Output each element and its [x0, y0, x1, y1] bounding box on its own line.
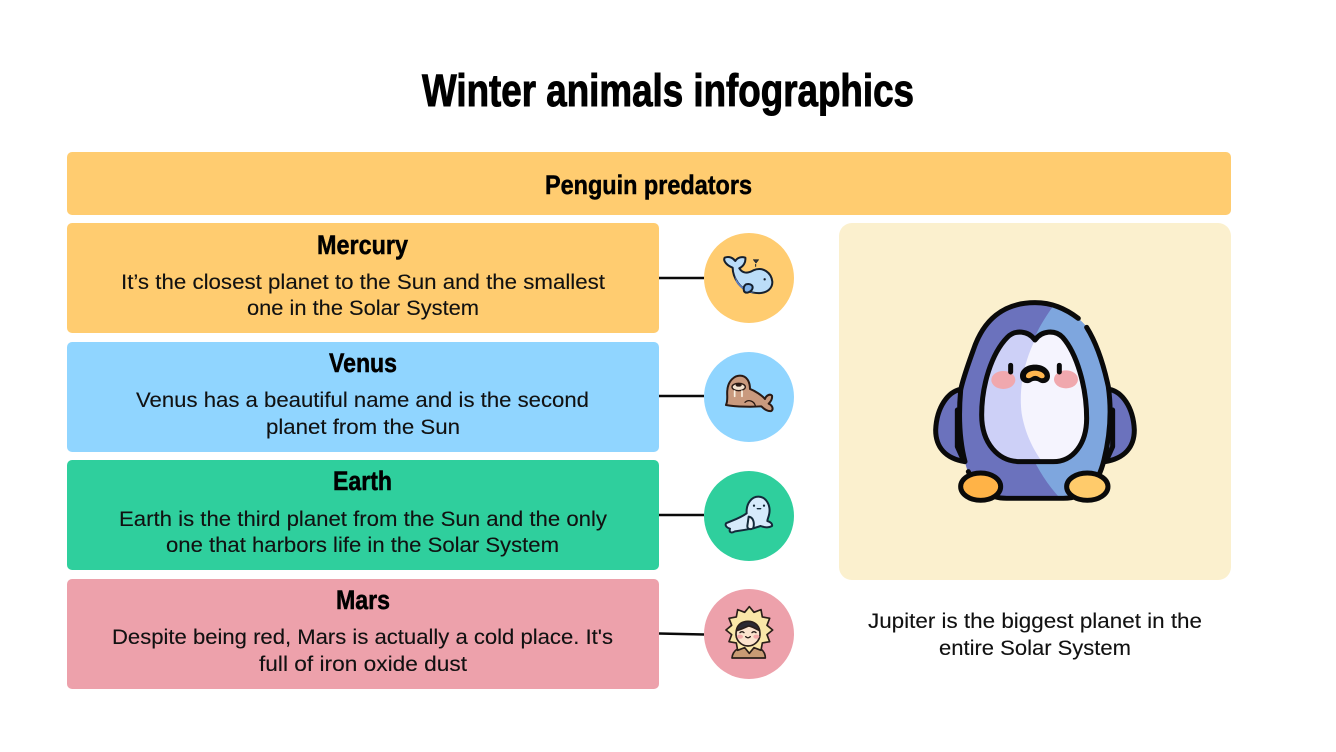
caption: Jupiter: Jupiter is the biggest planet in the: [868, 609, 1202, 633]
panel: Venus: [67, 342, 659, 452]
panel: Earth: [67, 460, 659, 570]
icon: walrus: [704, 352, 794, 442]
panel: Mars: [67, 579, 659, 689]
panel: penguin card: [839, 223, 1231, 580]
panel: Mars: Despite being red, Mars is actually a cold place. It's: [112, 625, 613, 649]
panel: Mercury: one in the Solar System: [247, 296, 479, 320]
connector: Mercury: [659, 277, 704, 279]
panel: Venus: Venus: [329, 348, 397, 378]
caption: Jupiter: entire Solar System: [939, 636, 1131, 660]
icon: seal: [704, 471, 794, 561]
connector: Venus: [659, 395, 704, 397]
panel: Mars: Mars: [336, 585, 390, 615]
panel: Earth: Earth: [333, 466, 392, 496]
panel: Mercury: It’s the closest planet to the Sun and the smallest: [121, 270, 605, 294]
panel: Earth: Earth is the third planet from the Sun and the only: [119, 507, 607, 531]
panel: Earth: one that harbors life in the Solar System: [166, 533, 559, 557]
icon: penguin: [936, 303, 1134, 500]
title: Winter animals infographics: [422, 65, 914, 116]
icon: person in fur hood: [704, 589, 794, 679]
panel: Venus: Venus has a beautiful name and is the second: [136, 388, 589, 412]
header bar: Penguin predators: [67, 152, 1231, 215]
panel: Mars: full of iron oxide dust: [259, 652, 467, 676]
panel: Mercury: Mercury: [317, 230, 408, 260]
header bar: Penguin predators: Penguin predators: [545, 170, 752, 200]
panel: Venus: planet from the Sun: [266, 415, 460, 439]
connector: Earth: [659, 514, 704, 516]
connector: Mars: [659, 634, 704, 635]
caption: Jupiter: [868, 609, 1202, 660]
icon: whale: [704, 233, 794, 323]
panel: Mercury: [67, 223, 659, 333]
